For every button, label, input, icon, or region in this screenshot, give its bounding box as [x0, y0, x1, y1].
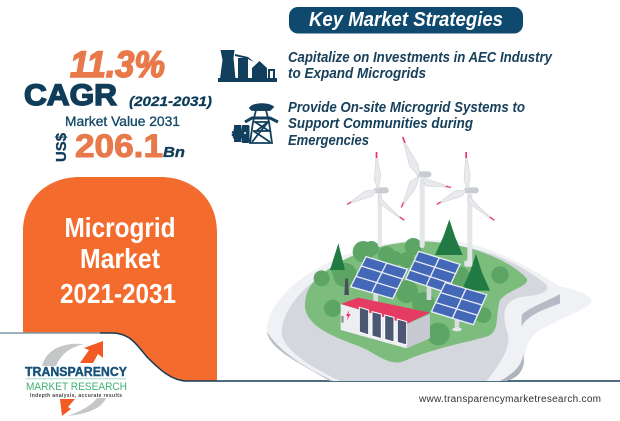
solar panels: [351, 251, 487, 331]
heading: Key Market Strategies: Key Market Strategies: [309, 9, 503, 31]
trees: [314, 219, 509, 345]
text: strategy 2: Emergencies: [288, 133, 369, 149]
statistic: CAGR block: CAGR: [24, 79, 117, 112]
logo: Transparency Market Research: TRANSPARENCY: [25, 365, 128, 379]
grass: [305, 242, 527, 362]
logo: Transparency Market Research: [25, 341, 128, 416]
text: strategy 1: [288, 50, 553, 82]
island base: [267, 240, 592, 381]
text: strategy 2: Provide On-site Microgrid Systems to: [288, 100, 525, 116]
text: strategy 1: to Expand Microgrids: [288, 66, 426, 82]
statistic: CAGR block: US$: [53, 132, 70, 162]
title: Microgrid Market 2021-2031: Microgrid: [64, 212, 176, 243]
website url: www.transparencymarketresearch.com: [418, 394, 601, 405]
panel: orange market title: [23, 177, 217, 381]
text: strategy 1: Capitalize on Investments in AEC Industry: [288, 50, 553, 66]
logo: Transparency Market Research: Indepth analysis, accurate results: [30, 393, 122, 399]
statistic: CAGR block: Market Value 2031: [65, 113, 180, 129]
logo swoosh arcs: [42, 344, 84, 366]
illustration: microgrid island: [267, 137, 592, 381]
logo: Transparency Market Research: MARKET RESEARCH: [26, 381, 127, 393]
battery storage containers: [341, 298, 430, 348]
statistic: CAGR block: 11.3%: [70, 44, 165, 85]
icon: transmission tower with generator: [232, 104, 278, 143]
statistic: CAGR block: Bn: [163, 144, 185, 161]
title: Microgrid Market 2021-2031: [60, 212, 176, 309]
logo arrows: [80, 341, 103, 363]
footer divider line: [0, 333, 620, 381]
wind turbine towers: [374, 171, 479, 267]
title: Microgrid Market 2021-2031: 2021-2031: [60, 278, 176, 309]
statistic: CAGR block: (2021-2031): [129, 93, 212, 109]
title: Microgrid Market 2021-2031: Market: [80, 243, 160, 274]
red blade tips: [347, 137, 495, 221]
statistic: CAGR block: 206.1: [75, 128, 163, 164]
text: strategy 2: [288, 100, 525, 149]
text: strategy 2: Support Communities during: [288, 116, 473, 132]
turbine blades: [347, 138, 494, 221]
icon: power plant: [218, 50, 277, 82]
statistic: CAGR block: [24, 44, 212, 164]
